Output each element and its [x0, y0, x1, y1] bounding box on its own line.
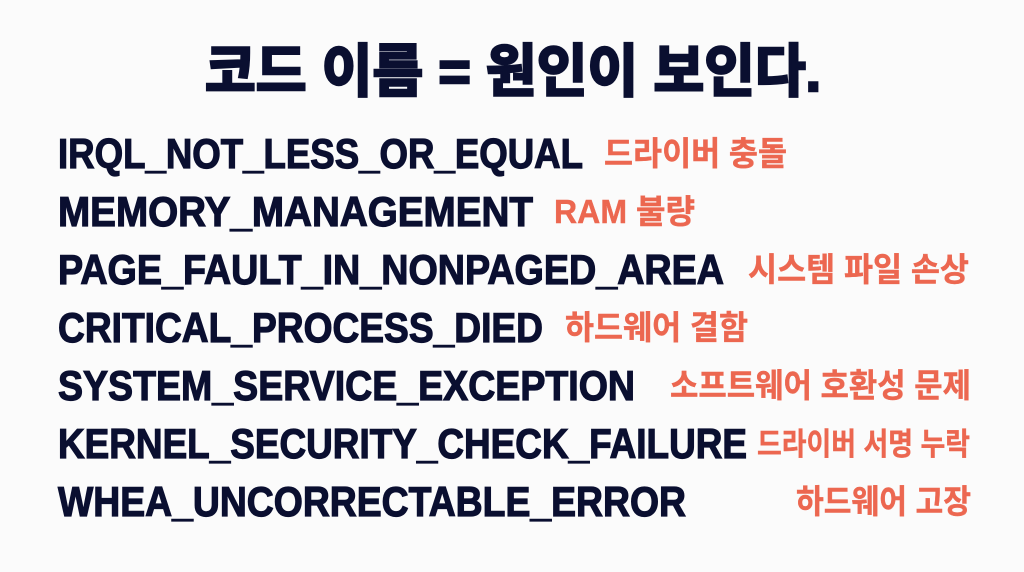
row 5: cause: 소프트웨어 호환성 문제	[670, 367, 971, 404]
row 4: error code: CRITICAL_PROCESS_DIED	[58, 304, 543, 351]
row 1: error code: IRQL_NOT_LESS_OR_EQUAL	[58, 130, 583, 177]
row 4: cause: 하드웨어 결함	[565, 309, 748, 346]
row 7: cause: 하드웨어 고장	[796, 483, 971, 520]
row 6: cause: 드라이버 서명 누락	[757, 427, 970, 462]
row 3: error code: PAGE_FAULT_IN_NONPAGED_AREA	[58, 246, 724, 293]
row 5: error code: SYSTEM_SERVICE_EXCEPTION	[58, 362, 635, 409]
row 1: cause: 드라이버 충돌	[604, 135, 787, 172]
title: 코드 이름 = 원인이 보인다.	[205, 40, 821, 104]
row 7: error code: WHEA_UNCORRECTABLE_ERROR	[58, 478, 686, 525]
row 3: cause: 시스템 파일 손상	[748, 251, 969, 288]
row 2: cause: RAM 불량	[554, 193, 695, 230]
row 6: error code: KERNEL_SECURITY_CHECK_FAILURE	[58, 420, 747, 467]
row 2: error code: MEMORY_MANAGEMENT	[58, 188, 533, 235]
